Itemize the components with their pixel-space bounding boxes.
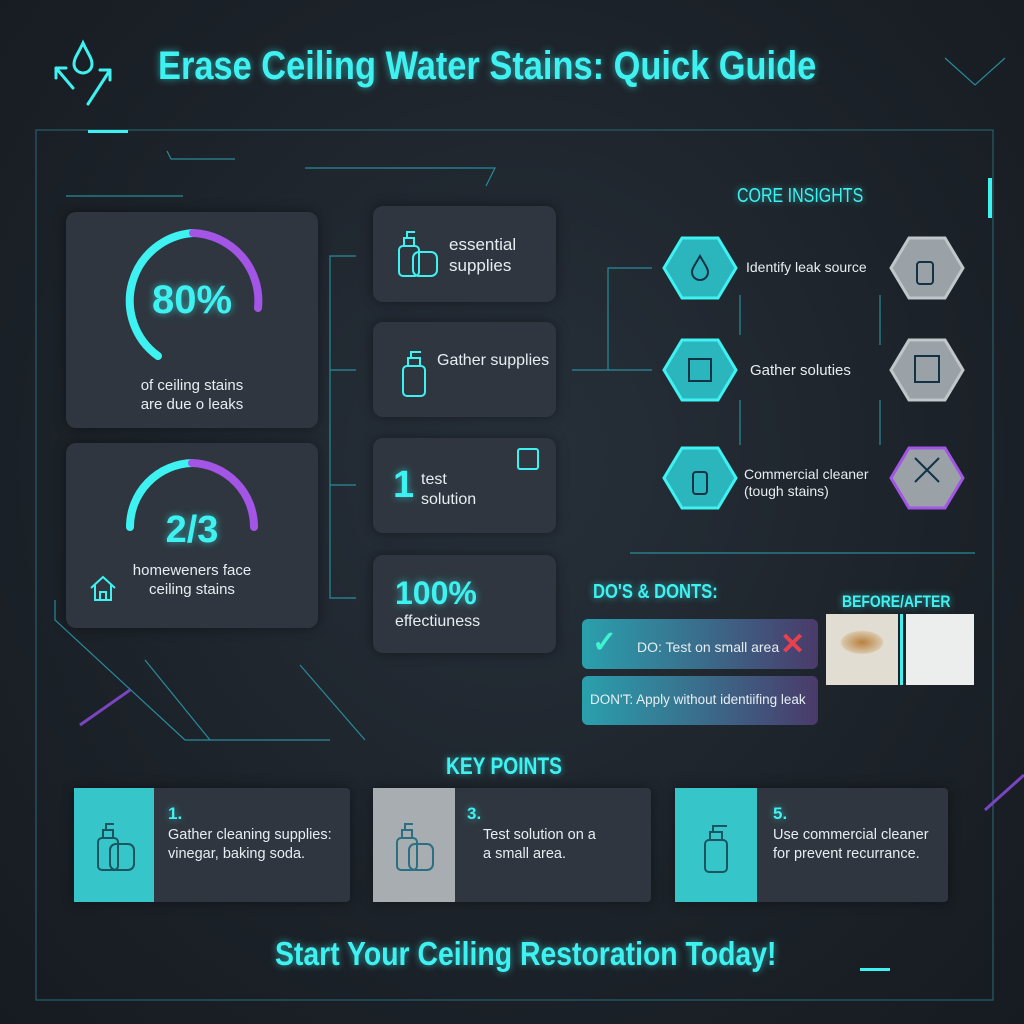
do row: DO: Test on small area	[637, 639, 779, 655]
text: Commercial cleaner	[744, 466, 868, 482]
key point 3: Test solution on a	[483, 827, 596, 843]
icon: house	[90, 576, 116, 601]
title: Erase Ceiling Water Stains: Quick Guide	[158, 44, 816, 88]
key point 5	[675, 788, 948, 902]
stat panel: 80%: of ceiling stains	[141, 377, 243, 394]
heading: key points: KEY POINTS	[446, 753, 562, 780]
dont row: DON'T: Apply without identiifing leak	[590, 692, 806, 707]
card: 1 test solution: solution	[421, 491, 476, 508]
do row: ✓	[592, 626, 617, 659]
key point 5: Use commercial cleaner	[773, 827, 929, 843]
key point 5: 5.	[773, 804, 787, 823]
do row	[582, 619, 818, 669]
card: 100%: 100%	[395, 575, 477, 611]
key point 3: a small area.	[483, 846, 566, 862]
icon: drop with arrows	[54, 40, 112, 106]
card: essential supplies: supplies	[449, 256, 511, 275]
card: 1 test solution: test	[421, 471, 447, 488]
stat panel: 2/3: 2/3	[166, 509, 218, 551]
key point 1	[74, 788, 350, 902]
key point 3: 3.	[467, 804, 481, 823]
stat panel: 80%	[66, 212, 318, 428]
dont row	[582, 676, 818, 725]
footer: Start Your Ceiling Restoration Today!	[275, 935, 776, 972]
key point 3	[373, 788, 651, 902]
insight labels: Identify leak source	[746, 259, 867, 275]
card: 1 test solution	[373, 438, 556, 533]
text: Gather soluties	[750, 362, 851, 379]
card: essential supplies: essential	[449, 235, 516, 254]
key point 5: for prevent recurrance.	[773, 846, 920, 862]
key point 1: Gather cleaning supplies:	[168, 827, 332, 843]
stat panel: 80%: 80%	[152, 278, 232, 322]
stat panel: 2/3: homeweners face	[133, 562, 251, 579]
stat panel: 80%: are due o leaks	[141, 396, 243, 413]
card: essential supplies	[373, 206, 556, 302]
before/after: BEFORE/AFTER	[842, 592, 950, 611]
do row: ✕	[780, 628, 805, 661]
stat panel: 2/3	[66, 443, 318, 628]
key point 1: 1.	[168, 804, 182, 823]
card: 1 test solution: 1	[393, 464, 414, 506]
card: 100%: effectiuness	[395, 613, 480, 630]
card: gather supplies	[373, 322, 556, 417]
text: (tough stains)	[744, 483, 829, 499]
heading: core insights: CORE INSIGHTS	[737, 185, 863, 207]
card: gather supplies: Gather supplies	[437, 352, 549, 369]
heading: dos and donts: DO'S & DONTS:	[593, 581, 718, 603]
card: 100%	[373, 555, 556, 653]
key point 1: vinegar, baking soda.	[168, 846, 305, 862]
stat panel: 2/3: ceiling stains	[149, 581, 235, 598]
